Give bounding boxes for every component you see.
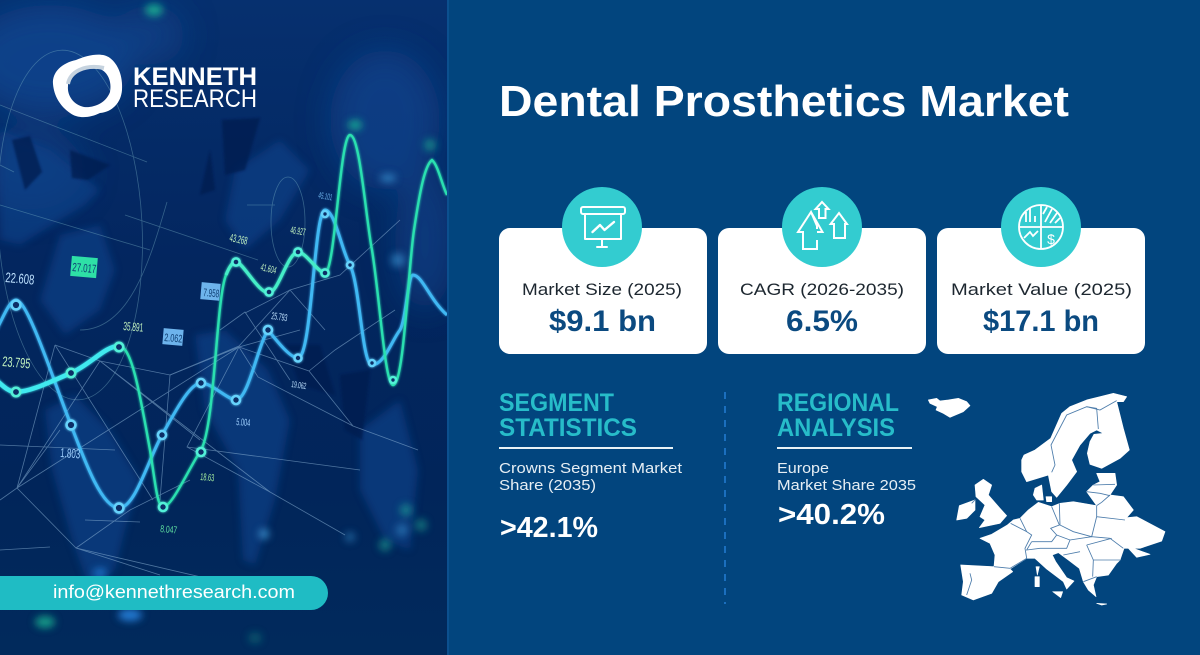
- panel: market value card: [937, 187, 1145, 354]
- panel: regional analysis: Europe: [777, 460, 829, 477]
- icon: pie with finance symbols: [1001, 187, 1081, 267]
- panel: regional analysis: REGIONAL: [777, 389, 899, 417]
- icon: rising arrows: [782, 187, 862, 267]
- network lines: [0, 220, 418, 600]
- panel: CAGR card: 6.5%: [786, 305, 858, 338]
- panel: market size card: $9.1 bn: [549, 305, 656, 338]
- chart data labels: 41.604: [259, 262, 278, 277]
- panel: market value card: $17.1 bn: [983, 305, 1099, 338]
- chart data labels: 5.004: [236, 417, 251, 429]
- chart data labels: 23.795: [2, 353, 31, 371]
- chart data labels: 18.63: [200, 472, 215, 484]
- panel: segment statistics: >42.1%: [500, 512, 598, 544]
- icon: logo rings: [53, 55, 122, 117]
- chart data labels: 35.891: [123, 319, 144, 335]
- line chart: green series: [0, 135, 447, 511]
- chart data labels: 2.062: [164, 332, 183, 346]
- panel: regional analysis: ANALYSIS: [777, 414, 895, 442]
- contact pill: info@kennethresearch.com: [53, 582, 295, 602]
- chart data labels: 27.017: [72, 260, 97, 276]
- panel: regional analysis: [777, 389, 916, 531]
- panel: segment statistics: STATISTICS: [499, 414, 637, 442]
- panel edge strip: [447, 0, 449, 655]
- logo: [53, 55, 257, 117]
- panel: CAGR card: CAGR (2026-2035): [740, 280, 904, 299]
- chart data labels: 1.803: [60, 445, 81, 461]
- panel: segment statistics: [499, 389, 683, 544]
- icon: presentation board: [562, 187, 642, 267]
- panel: market value card: Market Value (2025): [951, 280, 1132, 299]
- chart data labels: 46.927: [289, 225, 306, 239]
- panel: CAGR card: [718, 187, 926, 354]
- bottom glow dots: [35, 4, 436, 644]
- chart data labels: [2, 190, 333, 536]
- world map shapes: [0, 5, 455, 590]
- line chart: blue series: [0, 210, 447, 512]
- title: Dental Prosthetics Market: [499, 77, 1069, 126]
- thin orbit ellipses and guide lines: [0, 46, 305, 404]
- icon: pie with finance symbols: $: [1047, 231, 1055, 247]
- map of Europe: [928, 393, 1165, 605]
- chart data labels: 22.608: [5, 269, 35, 288]
- contact pill: [0, 576, 328, 610]
- logo: RESEARCH: [133, 85, 257, 113]
- chart data labels: 25.793: [271, 311, 288, 324]
- panel: segment statistics: SEGMENT: [499, 389, 614, 417]
- logo text: KENNETH: [133, 63, 257, 91]
- panel: segment statistics: Share (2035): [499, 477, 596, 494]
- panel: market size card: Market Size (2025): [522, 280, 682, 299]
- chart data labels: 43.268: [228, 232, 248, 248]
- panel: market size card: [499, 187, 707, 354]
- panel: regional analysis: Market Share 2035: [777, 477, 916, 494]
- panel: segment statistics: Crowns Segment Market: [499, 460, 683, 477]
- chart data labels: 45.101: [318, 190, 333, 202]
- chart data labels: 19.062: [291, 379, 307, 391]
- panel: regional analysis: >40.2%: [778, 499, 885, 531]
- chart data labels: 7.958: [203, 287, 220, 300]
- panel: data visual left side: [0, 0, 455, 655]
- chart data labels: 8.047: [160, 524, 178, 536]
